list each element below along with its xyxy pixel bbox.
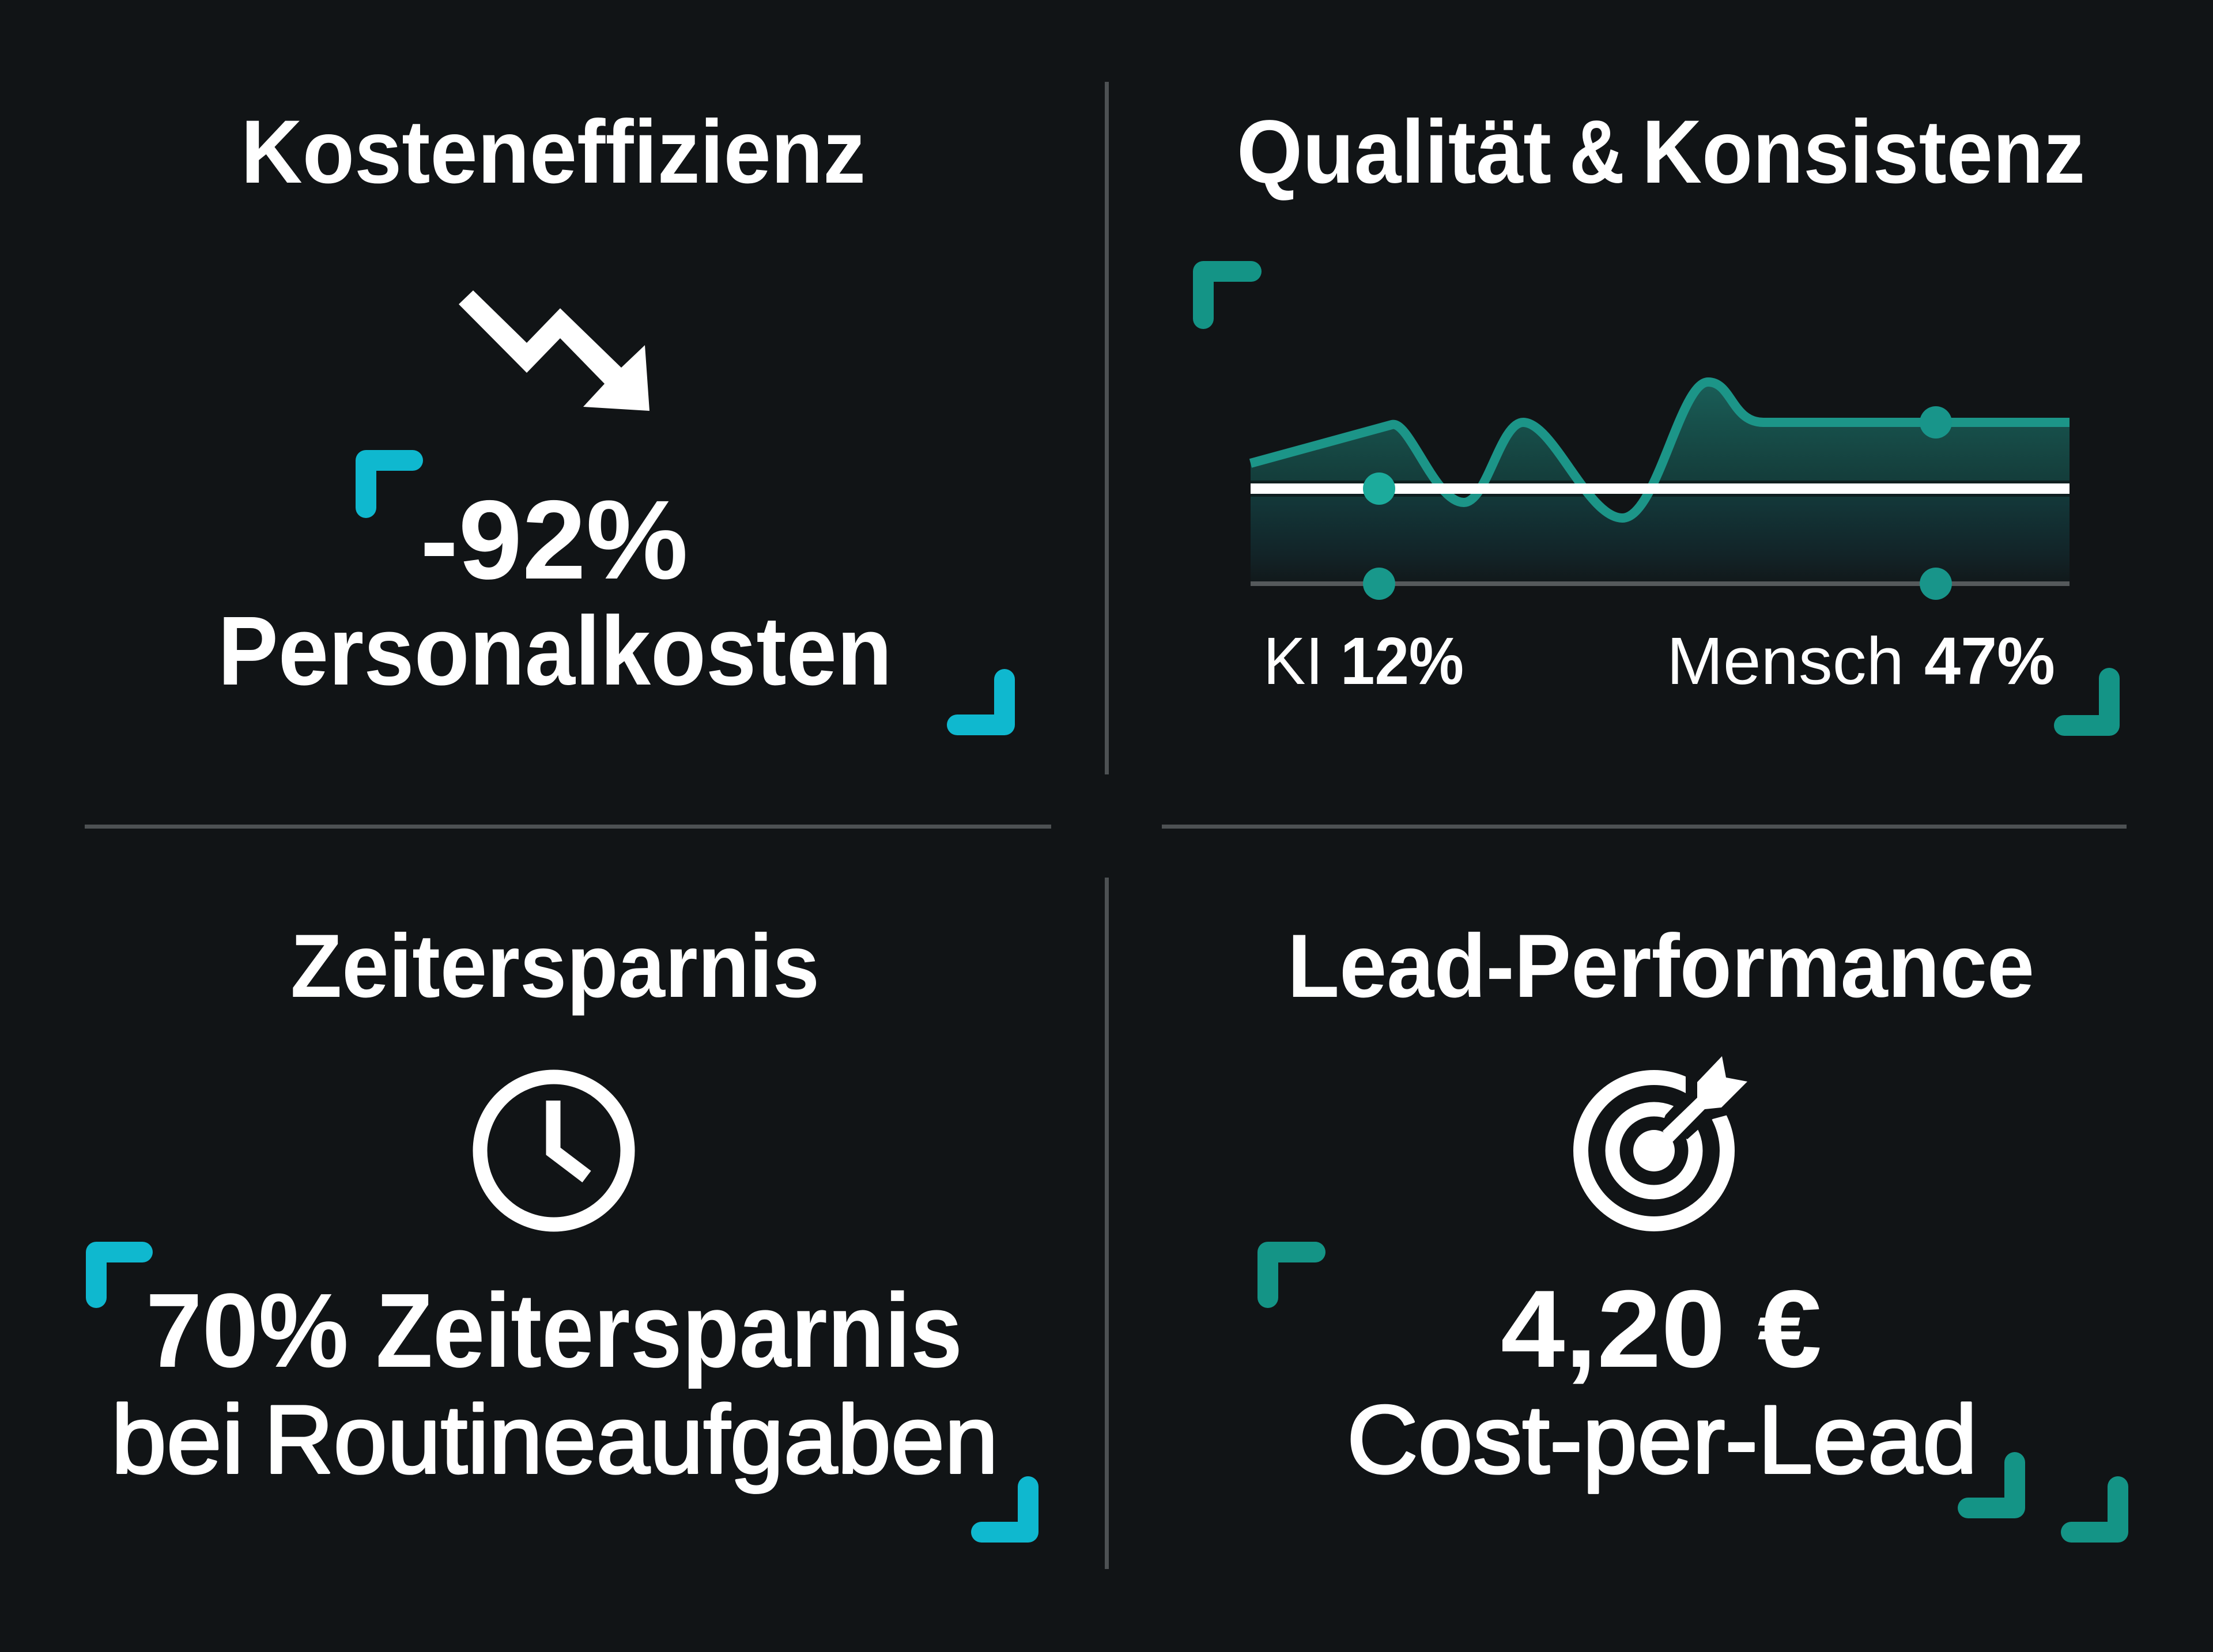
corner bracket bottom right inner (1968, 1462, 2015, 1508)
heading: Qualität & Konsistenz: & (1569, 102, 1625, 202)
panel: Qualität und Konsistenz (1203, 102, 2109, 725)
corner bracket bottom right (957, 679, 1004, 725)
metric: 4,20 €: 4,20 € (1501, 1268, 1822, 1390)
area chart: KI vs Mensch (1251, 382, 2070, 600)
corner bracket top left (366, 460, 413, 508)
heading: Qualität & Konsistenz (1237, 102, 2085, 202)
heading: Qualität & Konsistenz: Konsistenz (1642, 102, 2085, 202)
corner bracket bottom right (2064, 678, 2109, 725)
panel: Lead-Performance (1268, 916, 2118, 1532)
icon: clock (480, 1077, 628, 1224)
heading: Qualität & Konsistenz: Qualität (1237, 102, 1551, 202)
label: Cost-per-Lead: Cost-per-Lead (1347, 1385, 1977, 1494)
corner bracket bottom right outer (2071, 1487, 2118, 1532)
icon: falling zigzag arrow (459, 290, 649, 411)
heading: Zeitersparnis: Zeitersparnis (290, 916, 820, 1016)
heading: Kosteneffizienz: Kosteneffizienz (241, 102, 866, 202)
metric: 70% Zeitersparnis: 70% (146, 1271, 349, 1389)
label: bei Routineaufgaben: bei (111, 1385, 244, 1494)
corner bracket top left (1203, 271, 1251, 319)
label: KI 12% (1263, 623, 1464, 698)
metric: 70% Zeitersparnis (146, 1271, 962, 1389)
metric: -92%: -92% (420, 477, 688, 603)
label: bei Routineaufgaben: Routineaufgaben (264, 1385, 998, 1494)
label: Personalkosten: Personalkosten (218, 596, 892, 706)
heading: Lead-Performance: Lead-Performance (1287, 916, 2034, 1016)
icon: target with arrow (1581, 1056, 1758, 1224)
corner bracket bottom right (981, 1487, 1028, 1532)
label: Mensch 47%: 47% (1924, 623, 2055, 698)
label: Mensch 47% (1667, 623, 2055, 698)
label: KI 12%: 12% (1340, 623, 1464, 698)
metric: 70% Zeitersparnis: Zeitersparnis (376, 1271, 962, 1389)
corner bracket top left (1268, 1252, 1315, 1298)
panel: Zeitersparnis (96, 916, 1028, 1532)
label: KI 12%: KI (1263, 623, 1323, 698)
corner bracket top left (96, 1252, 142, 1298)
panel: Kosteneffizienz (218, 102, 1004, 725)
label: Mensch 47%: Mensch (1667, 623, 1904, 698)
